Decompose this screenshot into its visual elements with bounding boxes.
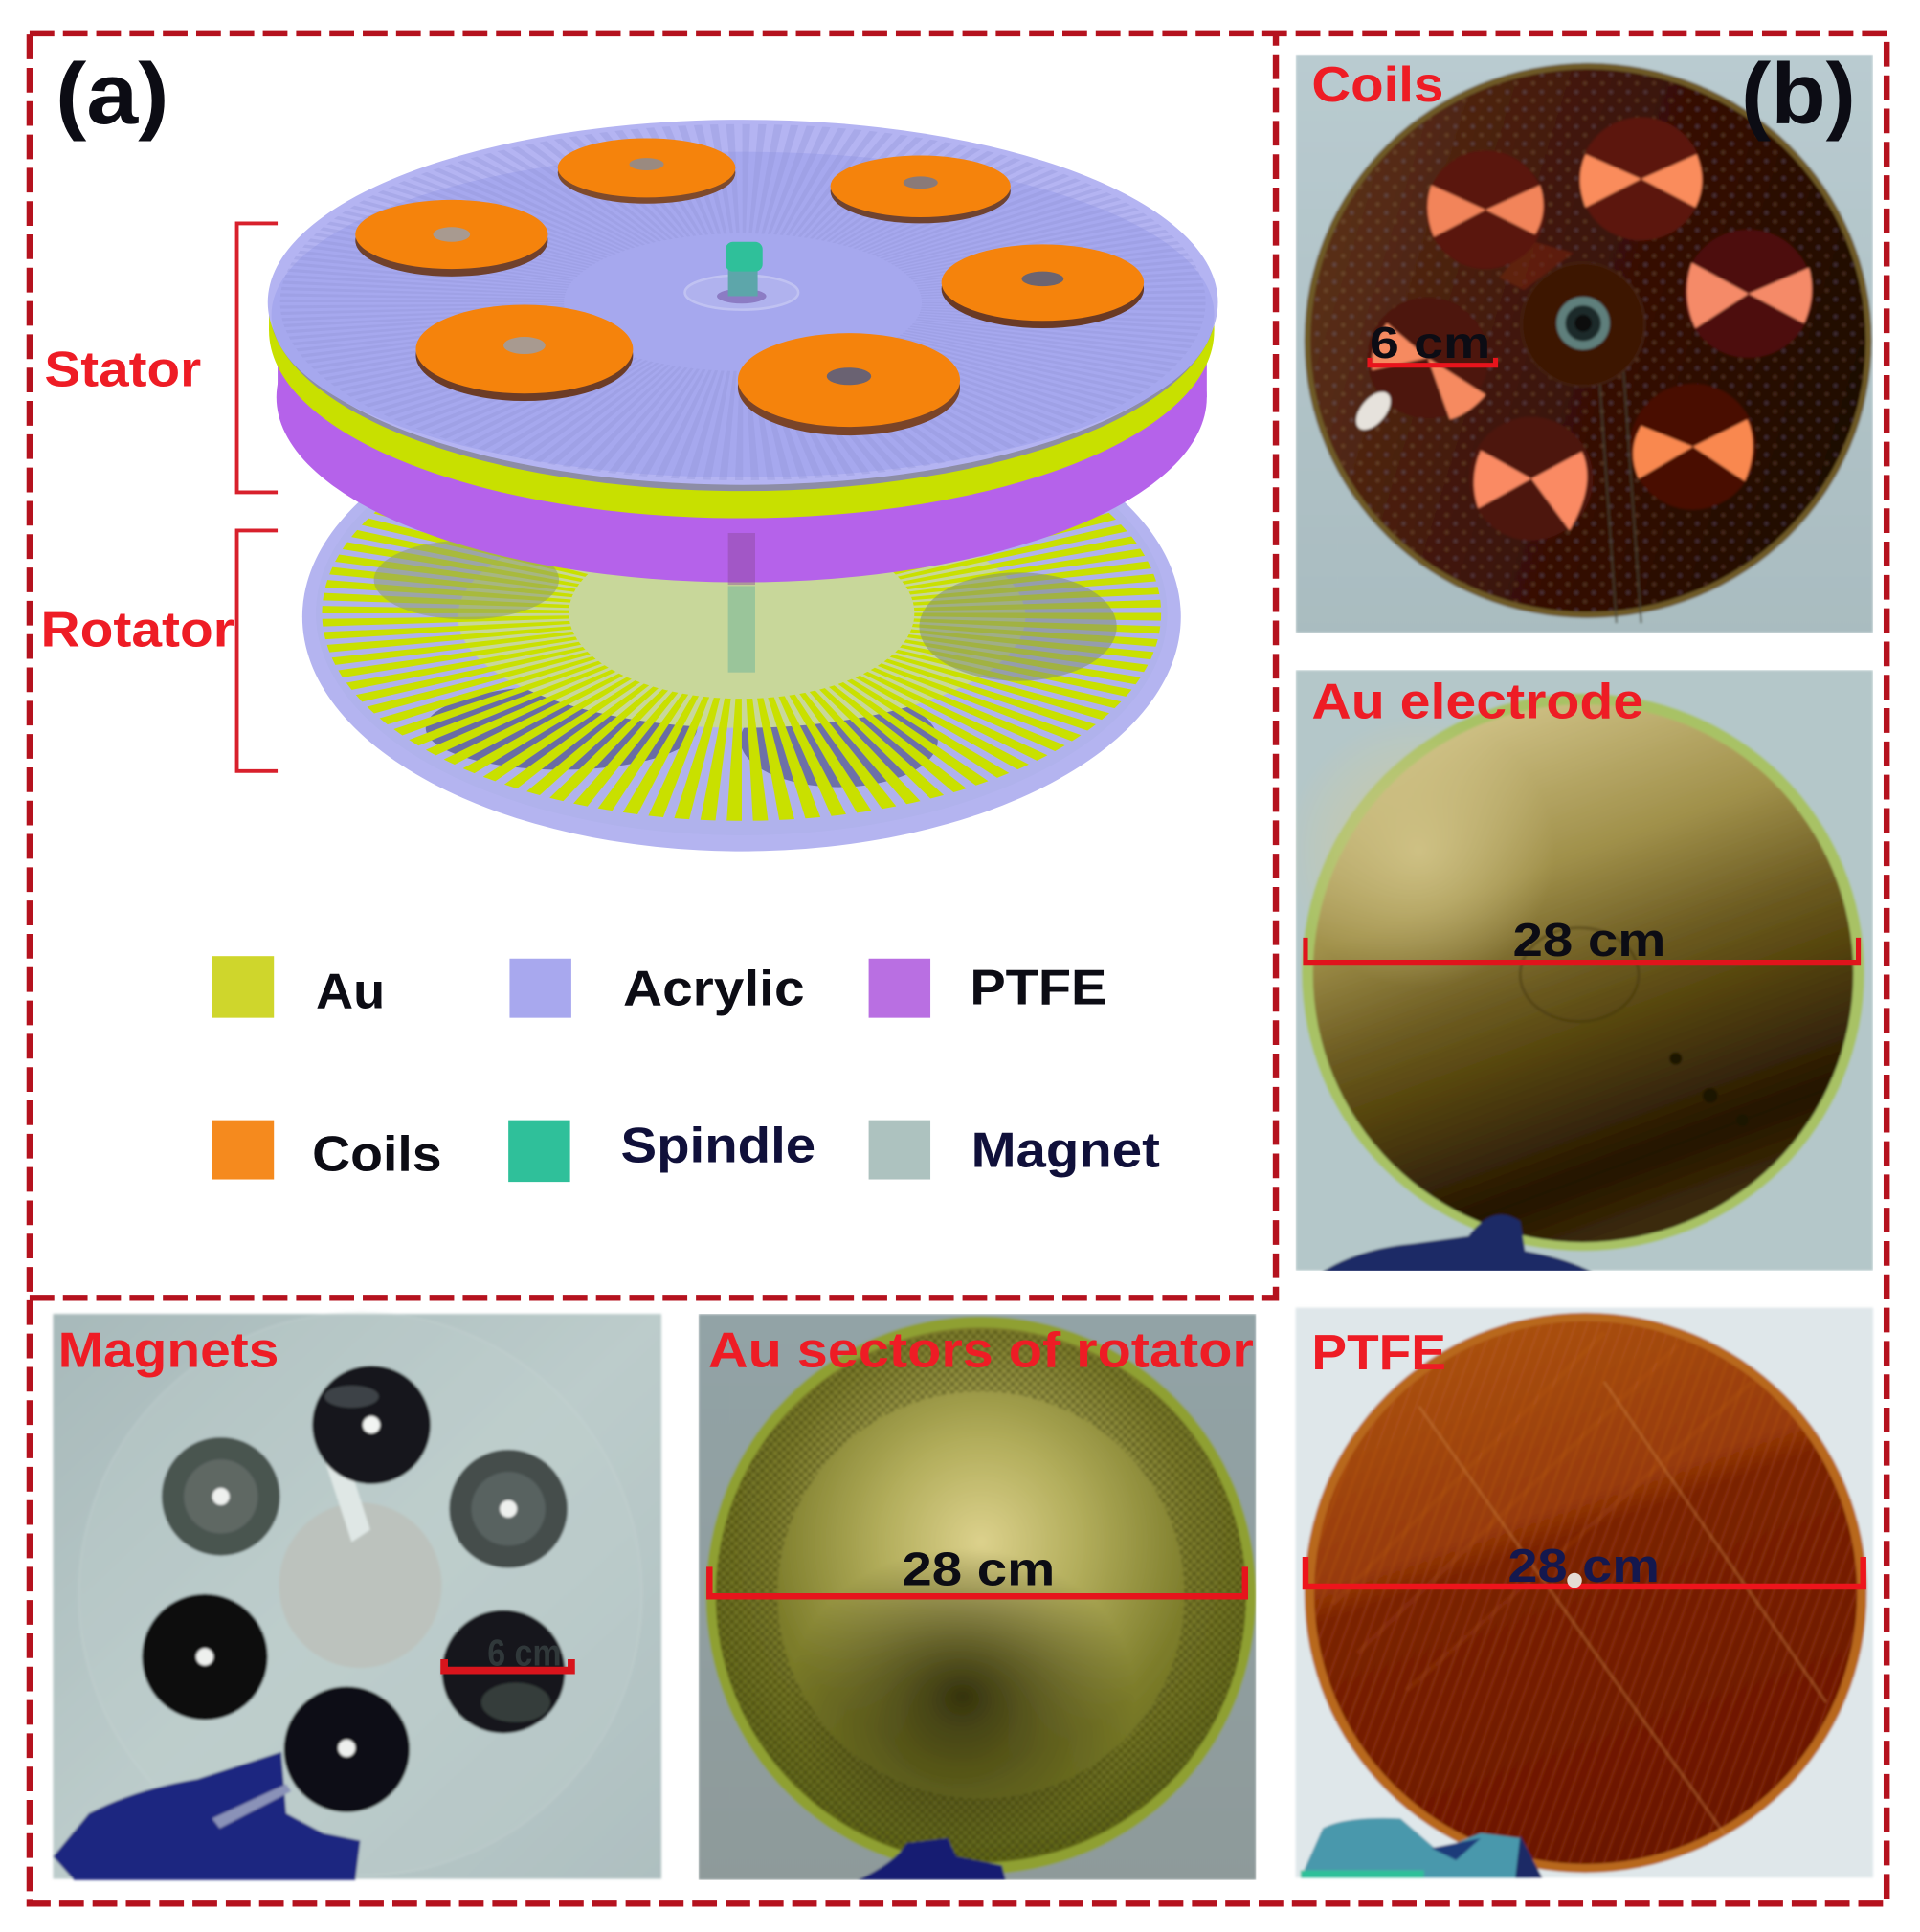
legend label coils: Coils bbox=[312, 1126, 442, 1182]
spindle through PTFE bbox=[728, 533, 755, 585]
label 28 cm: 28 cm bbox=[1507, 1541, 1660, 1592]
legend swatch acrylic bbox=[509, 959, 571, 1018]
magnet 2 bbox=[162, 1437, 280, 1556]
label magnets: Magnets bbox=[58, 1321, 279, 1377]
photo: Au electrode bbox=[1284, 670, 1873, 1274]
center hole bbox=[1567, 1573, 1582, 1588]
photo: coils bbox=[1296, 55, 1873, 633]
label Au electrode: Au electrode bbox=[1311, 673, 1643, 728]
coil 2 bbox=[1579, 118, 1703, 240]
glove bbox=[53, 1752, 360, 1880]
label (a): (a) bbox=[56, 46, 169, 143]
legend label PTFE: PTFE bbox=[970, 959, 1106, 1014]
coil 6 bbox=[1367, 298, 1488, 418]
stator: acrylic disc bbox=[268, 120, 1217, 491]
legend swatch Au bbox=[212, 956, 274, 1018]
stator: PTFE layer bbox=[277, 212, 1207, 583]
legend label spindle: Spindle bbox=[620, 1117, 815, 1172]
magnet 5 bbox=[442, 1610, 565, 1733]
scale bar 28 cm bbox=[709, 1566, 1245, 1596]
coil 3 bbox=[1685, 230, 1813, 358]
legend swatch PTFE bbox=[869, 959, 930, 1018]
scale bar 6 cm bbox=[1370, 358, 1496, 366]
glove bbox=[1301, 1818, 1530, 1877]
panel: (a) 3D schematic of the device bbox=[41, 46, 1217, 1182]
glove bbox=[1320, 1214, 1595, 1274]
legend label magnet: Magnet bbox=[971, 1122, 1160, 1178]
label coils: Coils bbox=[1311, 56, 1443, 112]
label rotator: Rotator bbox=[41, 602, 234, 657]
label 28 cm: 28 cm bbox=[1513, 915, 1665, 966]
legend swatch coils bbox=[212, 1121, 274, 1180]
hub bbox=[1522, 263, 1645, 387]
label stator: Stator bbox=[44, 342, 201, 397]
glare bbox=[1353, 389, 1394, 433]
coil 5 bbox=[1469, 417, 1593, 541]
legend swatch magnet bbox=[869, 1121, 930, 1180]
legend swatch spindle bbox=[508, 1121, 570, 1182]
magnet 3 bbox=[449, 1450, 568, 1568]
coil 4 bbox=[1630, 384, 1756, 509]
rotator bracket bbox=[237, 530, 278, 771]
magnet 6 bbox=[284, 1686, 410, 1812]
rotator disc bbox=[302, 383, 1181, 852]
scale bar 28 cm bbox=[1306, 938, 1859, 963]
center disc bbox=[279, 1502, 442, 1668]
glove bbox=[858, 1838, 1006, 1880]
scale bar 6 cm bbox=[444, 1659, 571, 1671]
label 6 cm: 6 cm bbox=[1370, 318, 1490, 367]
label 6 cm: 6 cm bbox=[487, 1632, 562, 1674]
coils on the stator bbox=[355, 138, 1144, 435]
spindle bbox=[685, 242, 798, 310]
legend label acrylic: Acrylic bbox=[623, 961, 805, 1016]
photo: Magnets bbox=[53, 1313, 661, 1880]
stator bracket bbox=[237, 223, 278, 492]
legend bbox=[212, 956, 1160, 1182]
label Au sectors of rotator: Au sectors of rotator bbox=[708, 1321, 1254, 1377]
label (b): (b) bbox=[1741, 46, 1856, 143]
photo: PTFE bbox=[1296, 1308, 1873, 1877]
label 28 cm: 28 cm bbox=[902, 1544, 1055, 1596]
coil 1 bbox=[1426, 150, 1545, 269]
stator: Au layer bbox=[269, 144, 1215, 519]
magnet 1 bbox=[312, 1366, 431, 1484]
scale bar 28 cm bbox=[1306, 1557, 1864, 1587]
magnet 4 bbox=[142, 1594, 268, 1720]
legend label Au: Au bbox=[316, 963, 385, 1018]
label PTFE: PTFE bbox=[1311, 1324, 1446, 1380]
photo: Au sectors of rotator bbox=[699, 1314, 1256, 1880]
